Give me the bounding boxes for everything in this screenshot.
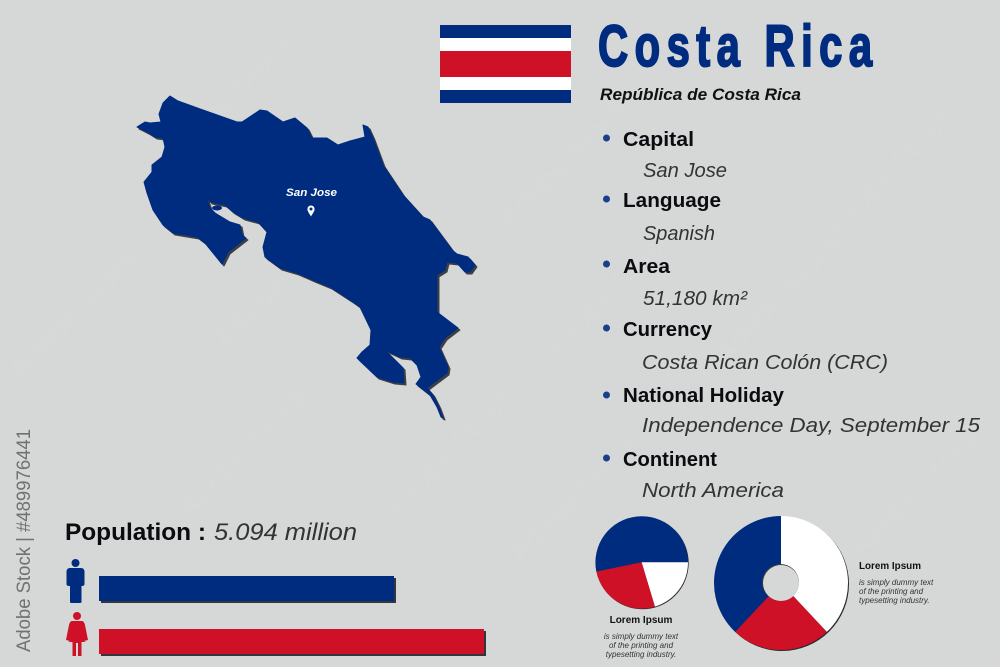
donut chart	[714, 516, 849, 651]
title: Costa Rica	[598, 13, 879, 79]
fact: currency: Currency	[623, 319, 713, 341]
donut caption: Lorem Ipsum	[859, 561, 921, 572]
fact: currency	[603, 319, 888, 374]
donut caption: of the printing and	[859, 587, 924, 596]
icon: female figure	[66, 612, 88, 656]
small pie chart	[595, 516, 689, 609]
donut caption: typesetting industry.	[859, 596, 930, 605]
population heading	[65, 519, 357, 546]
map: Costa Rica	[137, 96, 477, 420]
fact: area: Area	[623, 256, 671, 278]
icon: map pin	[307, 205, 315, 216]
male population bar	[99, 576, 396, 603]
fact: continent: Continent	[623, 449, 717, 471]
text: Adobe Stock	[172, 381, 316, 524]
subtitle: República de Costa Rica	[600, 86, 801, 104]
population heading: 5.094 million	[214, 519, 357, 546]
small pie caption: of the printing and	[609, 641, 674, 650]
facts list	[603, 129, 981, 502]
text: Adobe Stock	[502, 426, 646, 569]
small pie caption: typesetting industry.	[606, 650, 676, 659]
text: Adobe Stock	[157, 26, 301, 169]
fact: capital: Capital	[623, 129, 694, 151]
fact: capital	[603, 129, 727, 182]
flag of Costa Rica	[440, 25, 571, 103]
donut caption	[859, 561, 934, 605]
fact: area: 51,180 km²	[643, 288, 748, 310]
fact: language: Spanish	[643, 223, 715, 245]
text: Adobe Stock	[817, 101, 961, 244]
text: Adobe Stock	[207, 211, 351, 354]
fact: currency: Costa Rican Colón (CRC)	[642, 352, 888, 374]
fact: language: Language	[623, 190, 721, 212]
text: Adobe Stock	[707, 226, 851, 369]
text: Adobe Stock	[842, 421, 986, 564]
female population bar	[99, 629, 486, 656]
fact: area	[603, 256, 748, 310]
fact: national holiday: National Holiday	[623, 385, 785, 407]
text: Adobe Stock	[492, 91, 636, 234]
small pie caption	[604, 615, 679, 659]
fact: capital: San Jose	[643, 160, 727, 182]
small pie caption: is simply dummy text	[604, 632, 679, 641]
population heading: Population :	[65, 519, 206, 546]
fact: language	[603, 190, 721, 245]
text: Adobe Stock	[537, 221, 681, 364]
capital label: San Jose	[286, 187, 337, 199]
fact: national holiday	[603, 385, 981, 437]
fact: continent: North America	[642, 480, 784, 502]
fact: national holiday: Independence Day, September 15	[642, 415, 981, 437]
fact: continent	[603, 449, 784, 502]
small pie caption: Lorem Ipsum	[610, 615, 672, 626]
stock id label: Adobe Stock | #489976441	[14, 429, 35, 652]
donut caption: is simply dummy text	[859, 578, 934, 587]
text: Adobe Stock	[377, 381, 521, 524]
text: Adobe Stock	[2, 241, 146, 384]
icon: male figure	[66, 559, 84, 603]
